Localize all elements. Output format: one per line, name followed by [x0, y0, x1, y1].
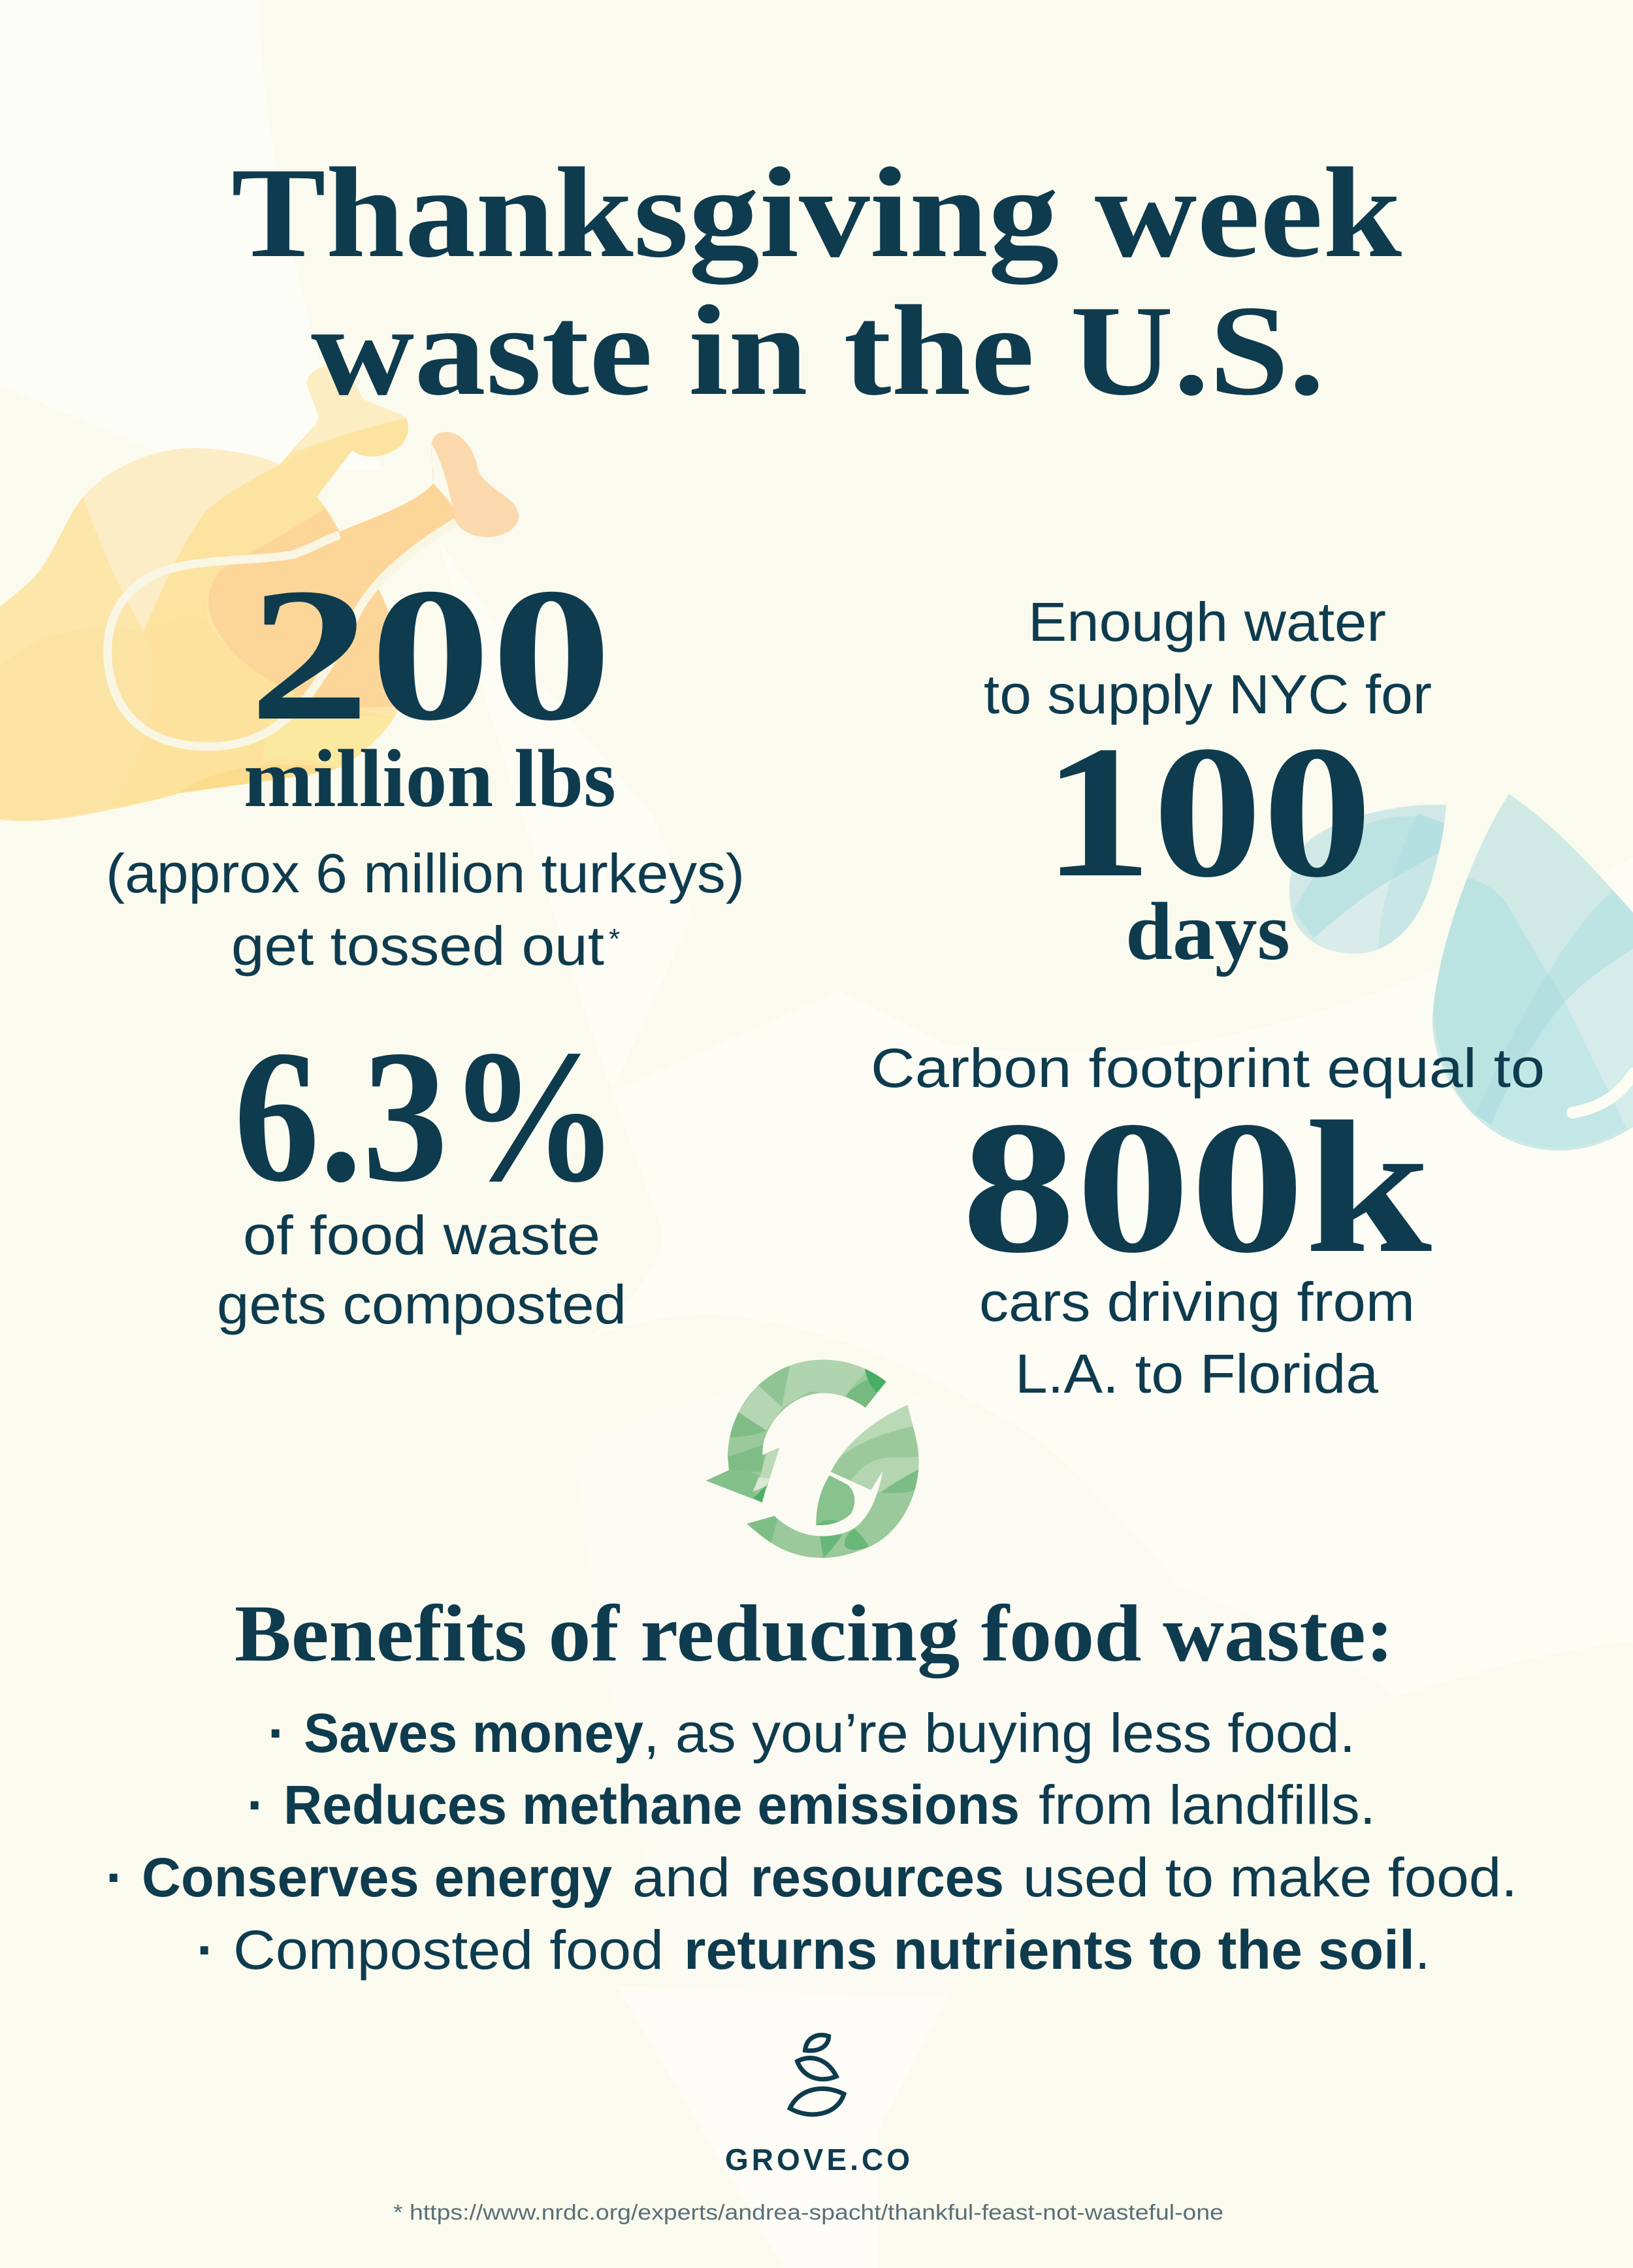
recycle left lower [727, 1444, 766, 1472]
benefit 4 [197, 1919, 1430, 1981]
stat: 6.3 percent [217, 1011, 626, 1335]
title line 2: waste in the U.S. [311, 279, 1325, 422]
recycle top right [846, 1375, 886, 1408]
benefit 1 [268, 1702, 1355, 1764]
recycle lower dark [820, 1534, 843, 1558]
turkey left lobe [0, 627, 153, 820]
turkey drumstick [208, 483, 457, 707]
icon: large water leaf [1429, 792, 1633, 1155]
tossed out text: get tossed out [231, 915, 604, 977]
large leaf upper right [1549, 889, 1633, 1001]
illustration: turkey [0, 365, 519, 821]
benefit 3: and [632, 1847, 730, 1908]
tossed out text: * [609, 923, 620, 955]
number 6.3%: 6.3% [234, 1011, 619, 1221]
water text line 1: Enough water [1028, 591, 1386, 653]
icon: small water leaf [1289, 805, 1446, 954]
number 100: 100 [1043, 707, 1372, 916]
recycle lower arrow [747, 1516, 777, 1543]
turkey body [0, 365, 408, 821]
unit days: days [1125, 886, 1290, 977]
recycle arrow dark [753, 1485, 766, 1502]
benefit 3 [106, 1847, 1517, 1908]
benefits list [106, 1702, 1517, 1981]
title [231, 141, 1402, 422]
recycle bottom dark [845, 1529, 869, 1549]
recycle leaf lobe dark [816, 1520, 839, 1526]
cars text: cars driving from [979, 1271, 1415, 1333]
water text line 2: to supply NYC for [984, 664, 1432, 725]
composted text: gets composted [217, 1274, 626, 1335]
turkey yellow underside [263, 710, 394, 768]
stat: 800k [871, 1037, 1545, 1404]
recycle darkest tip [865, 1369, 886, 1393]
number 200: 200 [249, 549, 612, 760]
brand name: GROVE.CO [725, 2143, 910, 2177]
benefit 1: · [268, 1702, 286, 1764]
small leaf band [1293, 816, 1446, 938]
benefit 4: . [1415, 1919, 1430, 1981]
benefit 4: returns nutrients to the soil [684, 1919, 1415, 1981]
LA text: L.A. to Florida [1015, 1343, 1378, 1404]
benefit 3: Conserves energy [142, 1847, 612, 1908]
small leaf light patch [1314, 880, 1391, 954]
small leaf dark patch [1393, 813, 1446, 880]
title line 1: Thanksgiving week [231, 141, 1402, 285]
large leaf dark junction [1475, 973, 1565, 1125]
stat: 200 million lbs [106, 549, 745, 977]
benefit 4: · [197, 1919, 215, 1981]
large leaf main panel [1433, 878, 1548, 1114]
turkey lower patch [108, 618, 394, 808]
benefit 1: Saves money [304, 1702, 643, 1764]
recycle arrow palest [753, 1478, 769, 1491]
stat: 100 days [984, 591, 1432, 977]
recycle leaf lobe [816, 1475, 854, 1525]
number 800k: 800k [962, 1082, 1433, 1292]
recycle top arc [782, 1359, 867, 1408]
recycle leaf pale middle [849, 1457, 921, 1493]
benefit 2: Reduces methane emissions [283, 1774, 1020, 1836]
turkey bottom shade [179, 765, 338, 793]
benefit 2 [247, 1774, 1376, 1836]
turkey light patch [84, 448, 279, 632]
icon: grove logo leaves [790, 2035, 844, 2114]
unit million lbs: million lbs [244, 734, 616, 824]
approx turkeys text: (approx 6 million turkeys) [106, 843, 745, 904]
turkey outline band [108, 522, 456, 747]
benefit 3: used to make food. [1023, 1847, 1517, 1908]
benefit 3: · [106, 1847, 124, 1908]
recycle leaf dark right [881, 1468, 920, 1493]
small leaf right patch [1378, 852, 1438, 949]
recycle left pale [738, 1385, 783, 1431]
footnote source: * https://www.nrdc.org/experts/andrea-spacht/thankful-feast-not-wasteful-one [393, 2200, 1223, 2224]
large leaf lower panel [1491, 1001, 1626, 1148]
carbon text: Carbon footprint equal to [871, 1037, 1545, 1099]
benefit 2: from landfills. [1039, 1774, 1376, 1836]
benefit 2: · [247, 1774, 265, 1836]
recycle left dark [728, 1412, 766, 1437]
recycle top left [758, 1365, 790, 1407]
benefit 3: resources [751, 1847, 1004, 1908]
large leaf lower right [1565, 948, 1633, 1001]
turkey wing tip [294, 365, 406, 451]
turkey neck [144, 418, 408, 632]
benefit 4: Composted food [233, 1919, 664, 1981]
large leaf highlight [1572, 1073, 1633, 1112]
icon: green recycle leaf [701, 1354, 923, 1563]
benefit 1: , as you’re buying less food. [643, 1702, 1355, 1764]
recycle arrow head [706, 1470, 762, 1502]
recycle arrow pale [760, 1448, 779, 1478]
food waste text: of food waste [243, 1205, 600, 1266]
recycle leaf lobe pale [830, 1471, 883, 1520]
recycle leaf pale top [836, 1402, 913, 1461]
heading: benefits: Benefits of reducing food waste: [234, 1589, 1394, 1679]
turkey drumstick bone [431, 432, 519, 537]
